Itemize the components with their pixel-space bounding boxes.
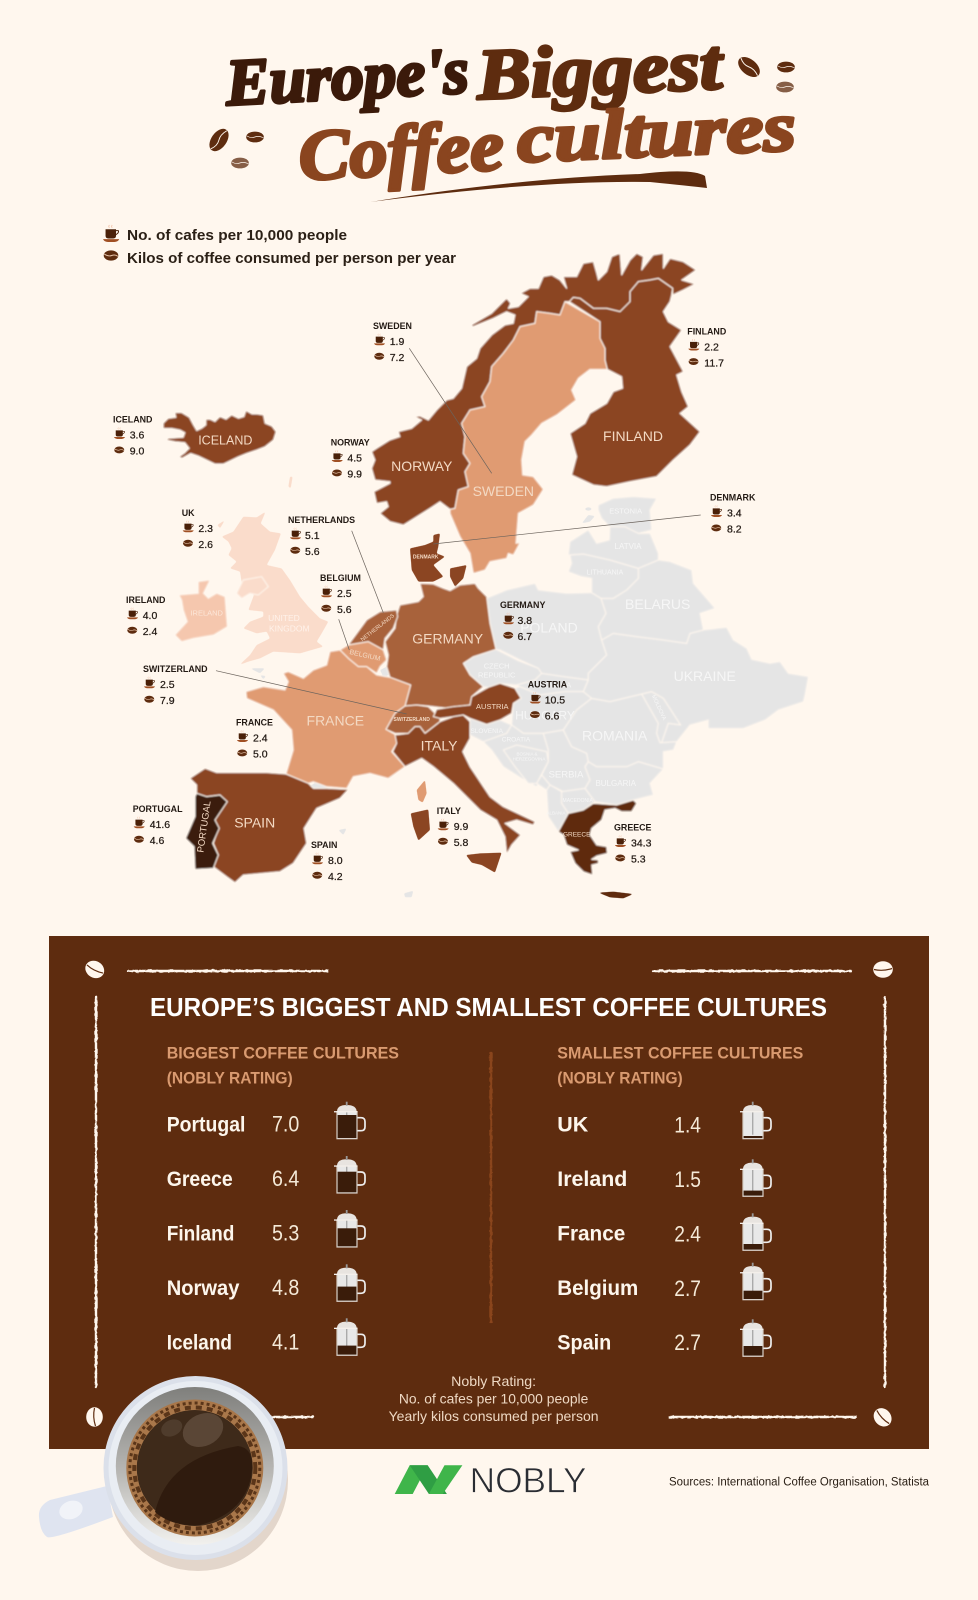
data label: Finland: 2.2 <box>704 341 719 353</box>
featured country name labels: FRANCE <box>307 712 364 728</box>
country: Ireland <box>175 580 227 642</box>
data label: Iceland: 3.6 <box>130 430 144 442</box>
data label: Sweden: 7.2 <box>390 352 404 364</box>
row: Norway 4.8: 4.8 <box>272 1275 299 1300</box>
data label: Denmark: 8.2 <box>727 524 742 536</box>
data label: Portugal: PORTUGAL <box>133 804 183 814</box>
data label: Netherlands: 5.1 <box>305 530 320 542</box>
illustration: coffee cup <box>39 1376 288 1571</box>
data label: Belgium: BELGIUM <box>320 573 361 583</box>
data label: Austria <box>528 679 568 722</box>
data label: Finland: 11.7 <box>704 357 724 369</box>
row: Norway 4.8 <box>167 1264 365 1301</box>
featured country name labels: GERMANY <box>412 630 484 646</box>
data label: Ireland: 4.0 <box>143 610 157 622</box>
country: Switzerland <box>386 705 440 733</box>
title: Biggest <box>474 24 726 115</box>
country: Italy <box>393 715 535 873</box>
grey country name labels: MOLDOVA <box>650 694 667 722</box>
grey country name labels: SERBIA <box>549 770 584 780</box>
data label: Spain: 4.2 <box>328 871 343 883</box>
featured country name labels: SWITZERLAND <box>394 717 430 723</box>
country: Spain <box>190 768 348 883</box>
data label: Belgium <box>320 573 361 616</box>
featured country name labels <box>190 428 663 853</box>
row: Spain 2.7: 2.7 <box>674 1330 701 1355</box>
data label: Italy: 5.8 <box>454 837 468 849</box>
featured country name labels: NORWAY <box>391 458 453 474</box>
data label: Italy <box>437 806 468 849</box>
grey country name labels: BOSNIA & <box>516 752 538 756</box>
featured country name labels: IRELAND <box>190 608 224 618</box>
featured country name labels: KINGDOM <box>269 624 310 634</box>
data label: UK <box>182 508 213 551</box>
data label: Switzerland: SWITZERLAND <box>143 664 208 674</box>
row: Ireland 1.5: Ireland <box>557 1168 627 1191</box>
title <box>223 24 797 196</box>
grey country name labels: ESTONIA <box>609 506 642 516</box>
data label: Portugal <box>133 804 183 847</box>
data label: Germany: 6.7 <box>518 631 532 643</box>
data label: Spain: 8.0 <box>328 855 343 867</box>
data label: Norway: 9.9 <box>347 469 362 481</box>
right column heading: SMALLEST COFFEE CULTURES <box>557 1044 803 1063</box>
data label: Norway <box>331 438 370 481</box>
title underline swoosh <box>370 171 707 202</box>
data label: Belgium: 2.5 <box>337 588 352 600</box>
data label: Austria: 6.6 <box>545 710 559 722</box>
data label: Austria: AUSTRIA <box>528 679 568 689</box>
right column heading <box>557 1044 803 1088</box>
legend: No. of cafes per 10,000 people <box>127 227 347 244</box>
data label: Italy: ITALY <box>437 806 461 816</box>
country: Denmark <box>410 533 467 587</box>
grey country name labels: REPUBLIC <box>478 670 516 680</box>
row: Greece 6.4: Greece <box>167 1168 233 1191</box>
data label: Norway: 4.5 <box>347 453 362 465</box>
grey country name labels: SLOVAKIA <box>535 680 571 690</box>
grey country name labels: MACEDONIA <box>563 798 594 804</box>
row: Spain 2.7 <box>557 1319 771 1356</box>
data label: France <box>236 718 273 761</box>
row: Norway 4.8: Norway <box>167 1277 240 1300</box>
data label: Netherlands: 5.6 <box>305 546 320 558</box>
row: France 2.4: France <box>557 1223 625 1246</box>
row: Ireland 1.5 <box>557 1159 771 1196</box>
featured country name labels: AUSTRIA <box>476 702 509 711</box>
row: Spain 2.7: Spain <box>557 1331 611 1354</box>
row: Belgium 2.7: 2.7 <box>674 1276 701 1301</box>
row: UK 1.4: 1.4 <box>674 1112 701 1138</box>
data label: Switzerland: 7.9 <box>160 695 175 707</box>
data label: UK: 2.3 <box>198 523 213 535</box>
featured country name labels: SPAIN <box>234 815 275 831</box>
featured country name labels: PORTUGAL <box>195 800 214 853</box>
row: France 2.4: 2.4 <box>674 1222 701 1246</box>
data label: Greece: 34.3 <box>631 838 652 850</box>
grey country name labels <box>470 506 736 815</box>
row: UK 1.4 <box>557 1102 771 1139</box>
country: Norway <box>372 253 696 525</box>
grey country name labels: HUNGARY <box>515 708 575 722</box>
data label: Spain <box>311 840 343 883</box>
data label: France: FRANCE <box>236 718 273 728</box>
title: Europe's <box>223 34 470 120</box>
data label: Finland <box>687 326 727 369</box>
data label: Greece <box>614 823 652 866</box>
data label: Norway: NORWAY <box>331 438 370 448</box>
row: Greece 6.4: 6.4 <box>272 1166 299 1191</box>
featured country name labels: UNITED <box>268 613 300 623</box>
legend <box>103 225 456 267</box>
featured country name labels: SWEDEN <box>473 483 534 499</box>
left column heading <box>167 1044 399 1088</box>
rating note: No. of cafes per 10,000 people <box>399 1390 589 1406</box>
grey country name labels: BULGARIA <box>595 779 637 788</box>
data label: Greece: 5.3 <box>631 854 646 866</box>
data label: France: 2.4 <box>253 733 268 745</box>
data label: Iceland <box>113 415 153 458</box>
country: Finland <box>569 278 700 487</box>
rating note: Yearly kilos consumed per person <box>389 1408 599 1424</box>
country: Belgium <box>340 642 387 673</box>
data label: Austria: 10.5 <box>545 694 565 706</box>
data label: Sweden: 1.9 <box>390 336 404 348</box>
rating note: Nobly Rating: <box>451 1373 536 1389</box>
country: Austria <box>433 683 521 724</box>
sources: Sources: International Coffee Organisation, Statista <box>669 1476 930 1488</box>
data label: Italy: 9.9 <box>454 821 468 833</box>
country: Portugal <box>186 793 227 869</box>
row: Iceland 4.1: Iceland <box>167 1331 232 1354</box>
row: Belgium 2.7 <box>557 1263 771 1301</box>
data label: Switzerland <box>143 664 208 707</box>
data label: Germany: 3.8 <box>518 615 532 627</box>
data label: France: 5.0 <box>253 749 268 761</box>
data label: Finland: FINLAND <box>687 326 727 336</box>
grey country name labels: CROATIA <box>502 736 531 744</box>
data label: UK: UK <box>182 508 195 518</box>
data label: Ireland <box>126 595 166 638</box>
data label: Germany: GERMANY <box>500 600 545 610</box>
grey country name labels: ALBANIA <box>546 810 566 815</box>
panel heading: EUROPE’S BIGGEST AND SMALLEST COFFEE CULTURES <box>150 992 827 1022</box>
row: Belgium 2.7: Belgium <box>557 1277 638 1300</box>
featured country name labels: ITALY <box>421 737 458 753</box>
title: Coffee <box>297 105 506 196</box>
data label: Ireland: IRELAND <box>126 595 166 605</box>
country shapes <box>163 253 808 898</box>
row: Iceland 4.1 <box>167 1318 365 1355</box>
leader lines <box>216 348 701 714</box>
grey country name labels: SLOVENIA <box>470 728 504 735</box>
data label: Netherlands <box>288 515 355 558</box>
row: UK 1.4: UK <box>557 1114 588 1137</box>
data label: UK: 2.6 <box>198 539 213 551</box>
data label: Ireland: 2.4 <box>143 626 157 638</box>
data label: Belgium: 5.6 <box>337 604 352 616</box>
grey country name labels: CZECH <box>484 662 510 670</box>
data label: Iceland: 9.0 <box>130 446 144 458</box>
country: Greece <box>558 800 637 898</box>
legend: Kilos of coffee consumed per person per year <box>127 250 456 267</box>
row: Ireland 1.5: 1.5 <box>674 1167 701 1192</box>
featured country name labels: DENMARK <box>413 554 439 560</box>
featured country name labels: NETHERLANDS <box>360 613 396 643</box>
data label: Spain: SPAIN <box>311 840 337 850</box>
row: Finland 5.3: 5.3 <box>272 1221 299 1246</box>
row: Greece 6.4 <box>167 1156 365 1193</box>
grey country name labels: LITHUANIA <box>587 570 624 576</box>
row: France 2.4 <box>557 1213 771 1250</box>
small grey territories <box>250 667 413 897</box>
country: Iceland <box>163 411 276 464</box>
row: Iceland 4.1: 4.1 <box>272 1329 299 1354</box>
country: France <box>246 650 427 803</box>
row: Portugal 7.0: 7.0 <box>272 1112 299 1137</box>
map of Europe <box>163 253 808 898</box>
data label: Greece: GREECE <box>614 823 652 833</box>
featured country name labels: ICELAND <box>198 434 252 448</box>
row: Finland 5.3 <box>167 1210 365 1247</box>
title: cultures <box>515 89 797 178</box>
data label: Netherlands: NETHERLANDS <box>288 515 355 525</box>
non-featured countries (grey) <box>463 497 808 832</box>
data label: Denmark: DENMARK <box>710 493 756 503</box>
data label: Sweden <box>373 321 412 364</box>
featured country name labels: BELGIUM <box>349 649 381 663</box>
left column heading: (NOBLY RATING) <box>167 1069 293 1088</box>
icons: title coffee beans <box>205 53 795 168</box>
panel: biggest and smallest coffee cultures <box>49 936 929 1449</box>
country: Netherlands <box>348 610 398 650</box>
data label: Iceland: ICELAND <box>113 415 153 425</box>
grey country name labels: UKRAINE <box>674 668 736 684</box>
country: Germany <box>385 583 496 708</box>
data label: Sweden: SWEDEN <box>373 321 412 331</box>
logo: Nobly: NOBLY <box>470 1461 587 1500</box>
featured country name labels: GREECE <box>563 831 591 838</box>
grey country name labels: BELARUS <box>625 596 690 612</box>
data label: Switzerland: 2.5 <box>160 679 175 691</box>
left column heading: BIGGEST COFFEE CULTURES <box>167 1044 399 1063</box>
country: United Kingdom <box>217 477 328 665</box>
chalk frame <box>96 971 885 1417</box>
row: Finland 5.3: Finland <box>167 1223 234 1246</box>
grey country name labels: LATVIA <box>615 542 642 551</box>
data label: Denmark <box>710 493 756 536</box>
logo: Nobly <box>395 1461 587 1500</box>
data label: Portugal: 41.6 <box>150 819 170 831</box>
data label: Portugal: 4.6 <box>150 835 164 847</box>
rating note <box>389 1373 599 1424</box>
data label: Denmark: 3.4 <box>727 508 742 520</box>
featured country name labels: FINLAND <box>603 428 663 444</box>
row: Portugal 7.0 <box>167 1102 365 1139</box>
right column heading: (NOBLY RATING) <box>557 1069 683 1088</box>
row: Portugal 7.0: Portugal <box>167 1114 245 1137</box>
data label: Germany <box>500 600 545 643</box>
grey country name labels: HERZEGOVINA <box>513 756 545 762</box>
grey country name labels: POLAND <box>520 619 578 635</box>
grey country name labels: ROMANIA <box>582 727 648 743</box>
country: Sweden <box>450 302 607 573</box>
